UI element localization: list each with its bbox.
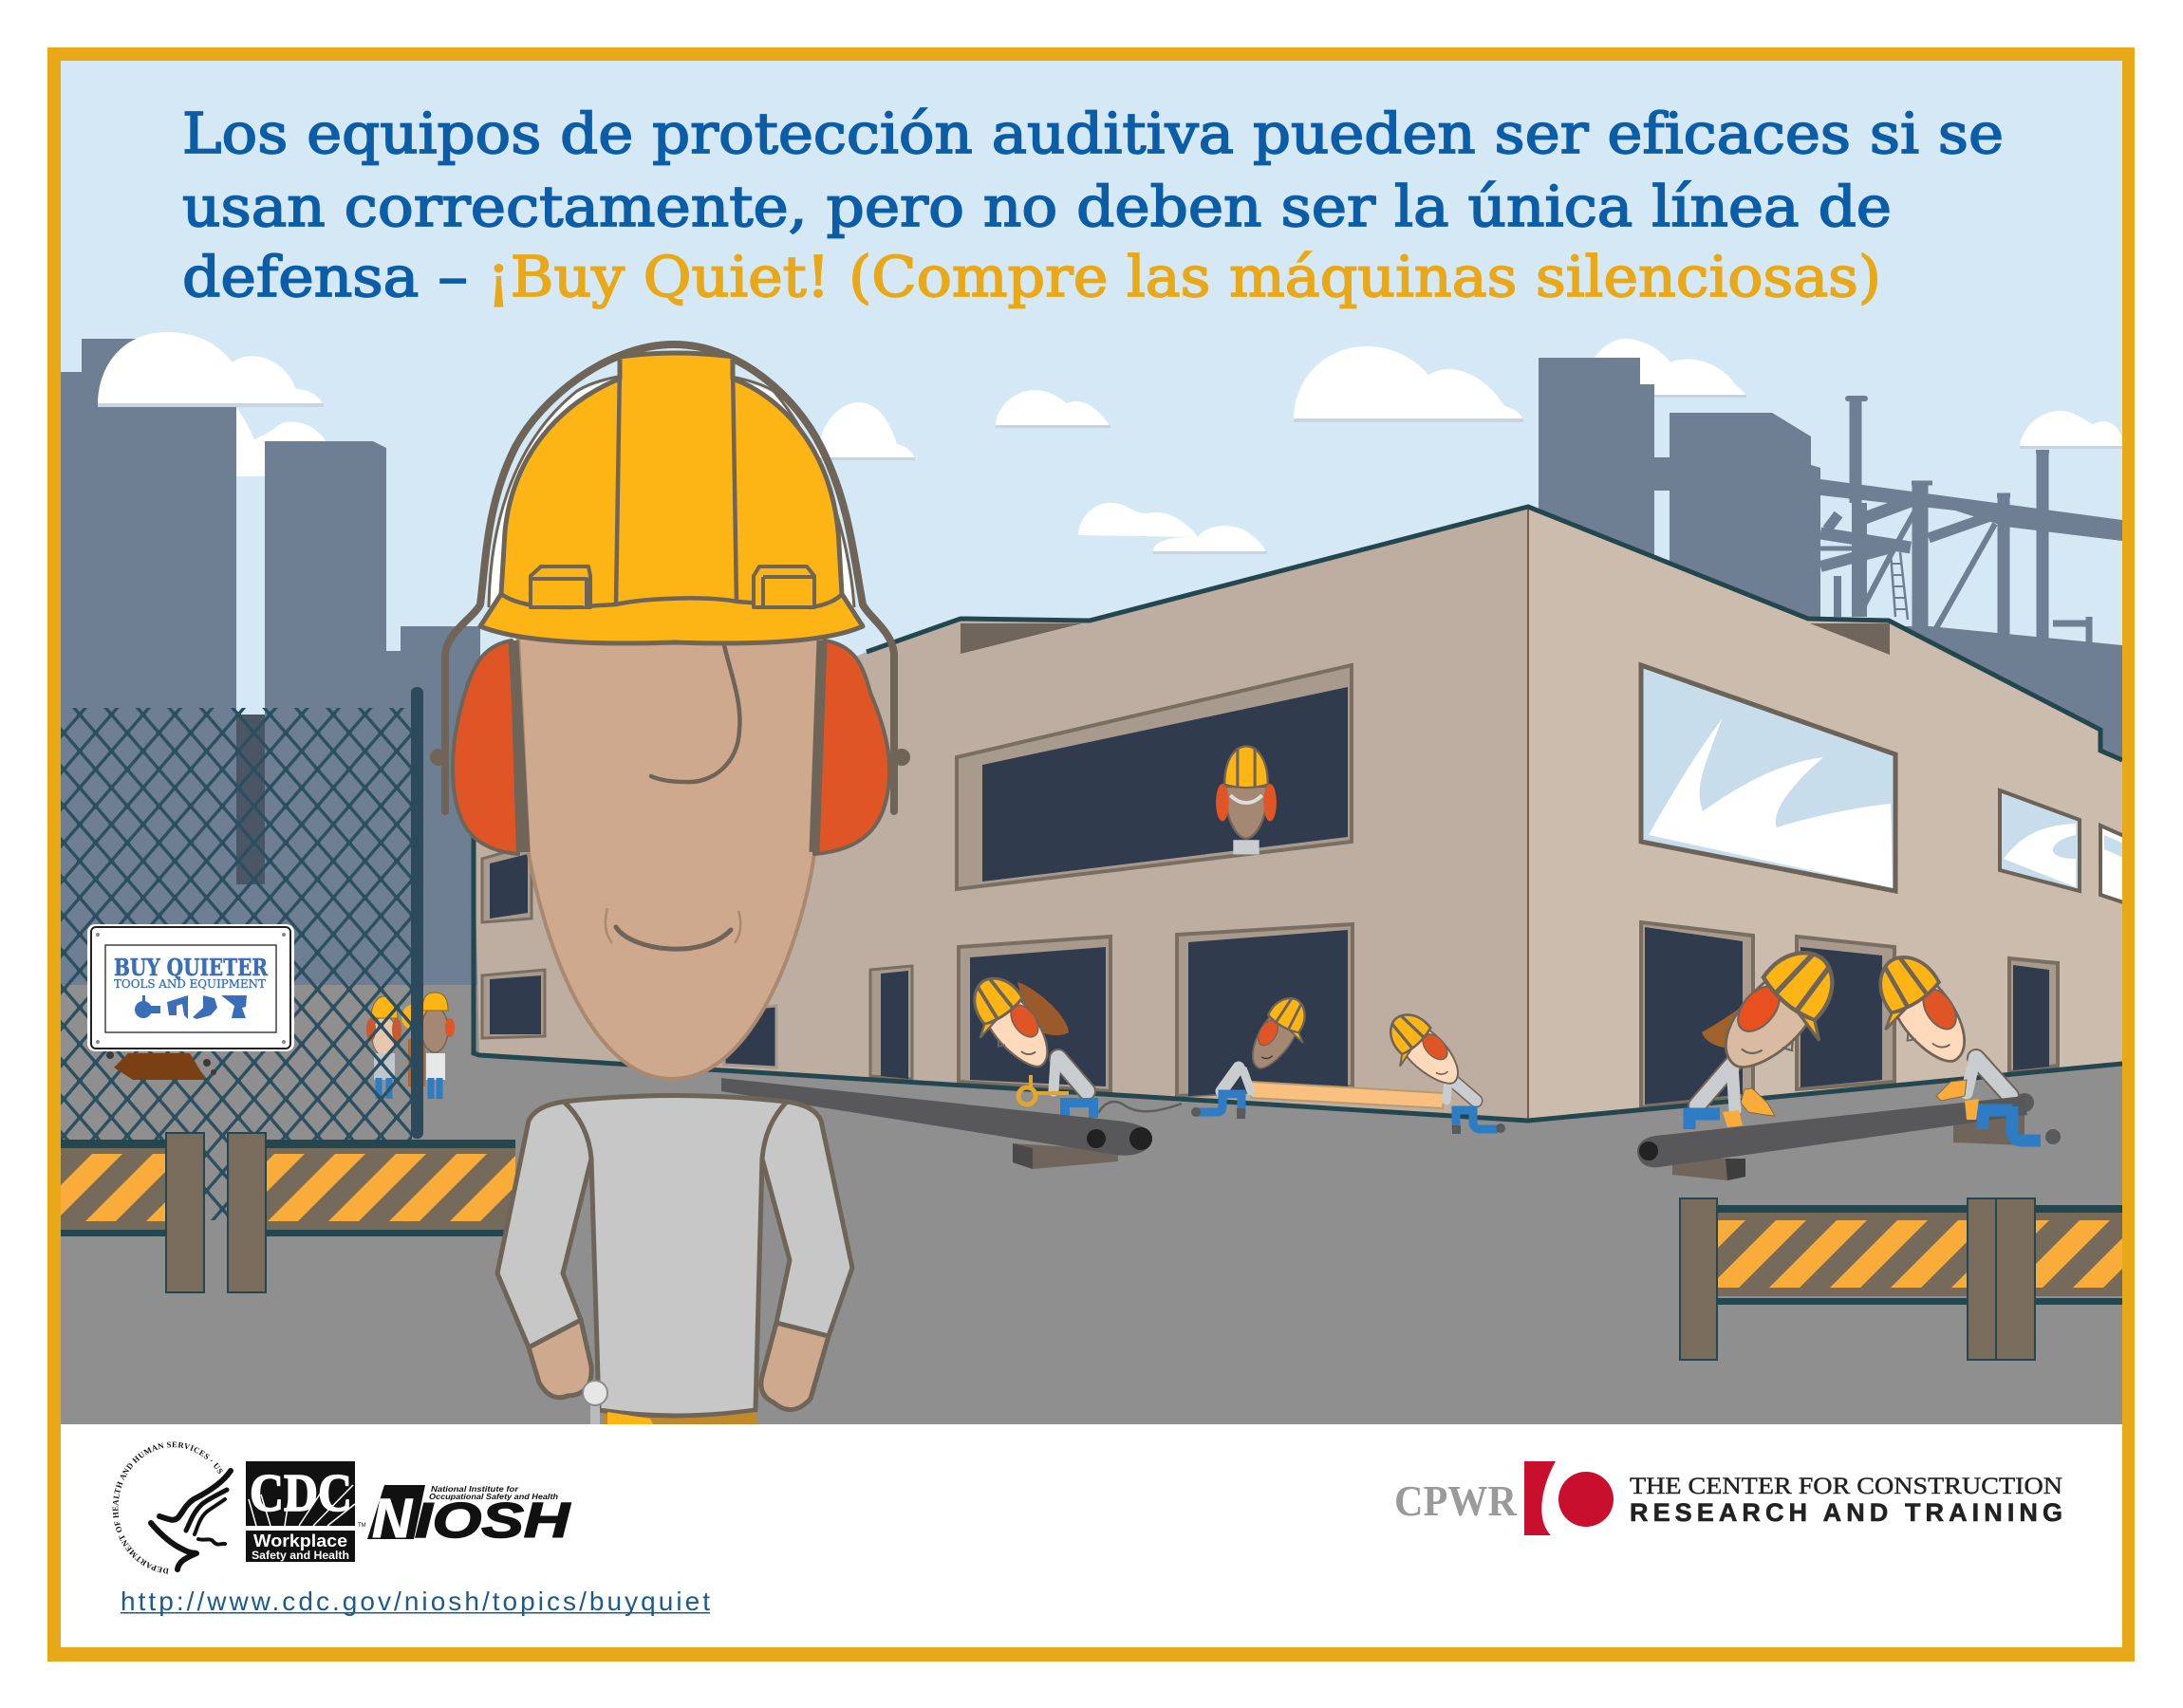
- door E: [2009, 958, 2058, 1072]
- sign heading: BUY QUIETER: [114, 954, 269, 981]
- illustration scene: [61, 61, 2126, 1428]
- left face: [474, 507, 1528, 1121]
- hat slots: [531, 566, 814, 607]
- roofline and base outline: [867, 507, 2122, 760]
- logo: CDC Workplace: Safety and Health: [252, 1549, 349, 1562]
- right earmuff: [814, 640, 910, 854]
- heading line 3 blue: defensa –: [182, 244, 468, 309]
- ground: [61, 985, 2122, 1424]
- small door: [870, 966, 912, 1079]
- url link: http://www.cdc.gov/niosh/topics/buyquiet: [121, 1587, 710, 1616]
- sign: Buy Quieter: [87, 924, 294, 1051]
- worker W5 with drill: [1967, 1058, 2034, 1112]
- pipe and block left: [721, 1078, 1152, 1169]
- heading line 2: usan correctamente, pero no deben ser la única línea de: [182, 174, 1892, 239]
- worker W1 with grinder: [973, 977, 1098, 1118]
- door C: [1641, 922, 1753, 1107]
- logo: CDC Workplace: Workplace: [253, 1532, 347, 1550]
- chain-link fence: [61, 687, 423, 1220]
- sign tool icons: [135, 995, 247, 1019]
- left earmuff: [430, 640, 525, 854]
- logo: CPWR: CPWR: [1394, 1476, 1518, 1525]
- cloud in front of left skyline: [98, 332, 324, 407]
- heading: [182, 101, 2004, 309]
- worker W5 legs and head: [1856, 945, 2061, 1144]
- lower door A: [959, 937, 1110, 1091]
- power cord: [1098, 1102, 1182, 1113]
- logo: NIOSH: Occupational Safety and Health: [429, 1493, 558, 1501]
- logo: CDC Workplace: TM: [358, 1523, 366, 1529]
- background skyline left: [61, 339, 480, 987]
- window 2 right face: [2000, 790, 2080, 891]
- cloud in front of structure: [2020, 411, 2126, 449]
- main building: [474, 507, 2126, 1121]
- logo: CPWR: THE CENTER FOR CONSTRUCTION: [1630, 1474, 2062, 1499]
- sign subheading: TOOLS AND EQUIPMENT: [114, 977, 266, 991]
- logo: NIOSH: N: [372, 1488, 413, 1550]
- logo: NIOSH: IOSH: [415, 1494, 571, 1549]
- lower door B: [1177, 924, 1353, 1096]
- belt light tool: [583, 1381, 607, 1426]
- torso: [564, 1095, 787, 1428]
- door D: [1797, 937, 1894, 1089]
- worker in upper window: [1216, 746, 1277, 854]
- mouth: [616, 927, 731, 949]
- main worker: [430, 344, 910, 1428]
- worker W4 with drill: [1684, 951, 1835, 1129]
- left sleeve: [497, 1102, 591, 1347]
- right face: [1528, 507, 2122, 1121]
- barrier left: [61, 1133, 515, 1292]
- background industrial structure right: [1539, 358, 2122, 769]
- logo: CPWR: RESEARCH AND TRAINING: [1630, 1498, 2062, 1527]
- earmuff headband: [445, 344, 894, 811]
- head: [518, 638, 822, 1079]
- heading line 3 orange: ¡Buy Quiet! (Compre las máquinas silenciosas): [487, 244, 1881, 309]
- logo: CPWR: [1394, 1461, 2062, 1535]
- small left windows: [482, 845, 776, 1068]
- logo: HHS: [112, 1442, 233, 1574]
- nose: [651, 645, 739, 782]
- pipe and block right: [1637, 1096, 2027, 1180]
- barrier right: [1680, 1198, 2122, 1360]
- right sleeve: [762, 1102, 852, 1336]
- right hand: [761, 1323, 829, 1410]
- logo: CDC Workplace: CDC: [250, 1464, 352, 1523]
- clouds behind buildings: [218, 339, 1746, 554]
- window 3 right face: [2100, 826, 2126, 903]
- logo: CDC Workplace: [246, 1461, 366, 1562]
- worker W3 lifting plank: [1390, 1013, 1505, 1134]
- left hand: [529, 1320, 591, 1398]
- logo: HHS: DEPARTMENT OF HEALTH AND HUMAN SERVICES · USA: [112, 1442, 223, 1574]
- upper window left face: [957, 665, 1352, 889]
- logo: NIOSH: [367, 1485, 571, 1550]
- hard hat: [480, 353, 863, 643]
- worker W2 lifting plank: [1191, 996, 1306, 1119]
- plank: [1251, 1082, 1445, 1108]
- small workers behind fence: [366, 993, 455, 1099]
- big window right face: [1641, 665, 1895, 891]
- heading line 1: Los equipos de protección auditiva pueden ser eficaces si se: [182, 101, 2004, 166]
- logo: NIOSH: National Institute for: [431, 1485, 519, 1494]
- brown rubble: [106, 1051, 216, 1080]
